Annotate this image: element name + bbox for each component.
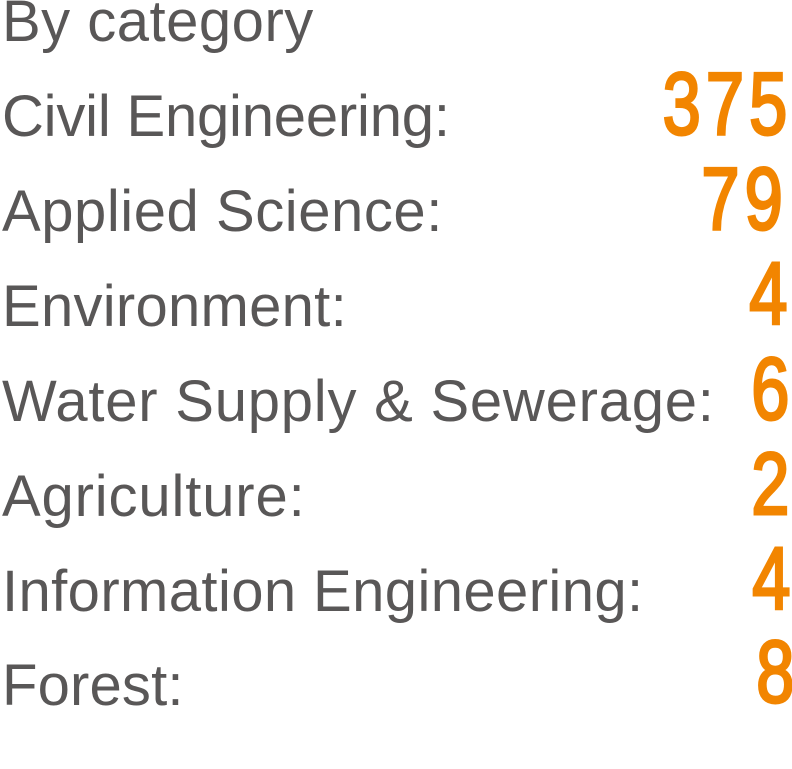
label: Forest: Forest: [2,653,184,718]
label: Civil Engineering: Civil Engineering: [2,84,450,149]
label: Water Supply & Sewerage: Water Supply & Sewerage: [2,369,715,434]
label: Information Engineering: Information Engineering: [2,559,644,624]
label: Applied Science: Applied Science: [2,179,443,244]
value: 79: 79 [702,149,788,248]
value: 4: 4 [749,244,792,343]
label: Environment: Environment: [2,274,347,339]
value: 375: 375 [662,54,792,153]
label: Agriculture: Agriculture: [2,464,306,529]
